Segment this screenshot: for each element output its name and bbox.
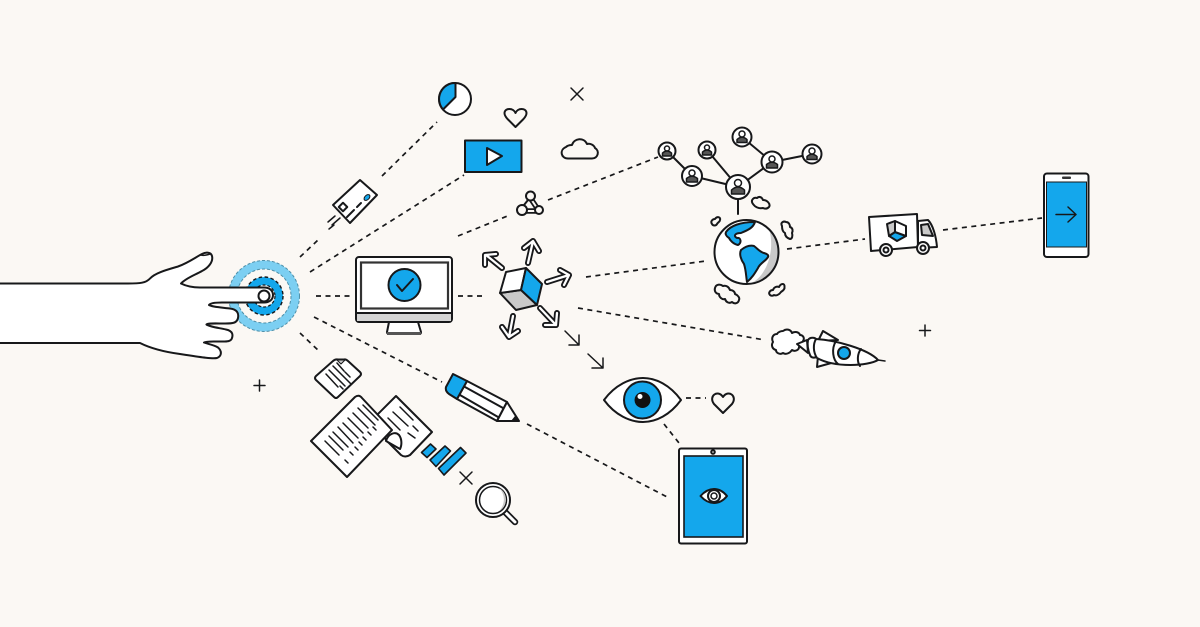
icon: small document	[315, 359, 361, 398]
icon: pointing hand	[0, 253, 273, 358]
icon: cloud top	[562, 139, 598, 158]
exhaust cloud	[772, 330, 804, 354]
icon: pie chart	[439, 83, 471, 115]
icon: desktop monitor	[356, 257, 452, 335]
node	[658, 142, 676, 160]
icon: cube with arrows	[485, 241, 569, 337]
cube on truck	[887, 221, 906, 241]
icon: eye	[604, 378, 681, 422]
node	[762, 152, 782, 172]
node	[726, 175, 750, 199]
icon: magnifying glass	[476, 483, 515, 522]
eye on tablet	[700, 489, 727, 503]
icon: cross bottom	[460, 472, 472, 484]
icon: globe with clouds	[711, 197, 793, 303]
icon: heart top	[505, 109, 526, 127]
icon: bar chart	[422, 444, 466, 475]
dashed connector lines	[300, 122, 1042, 498]
node	[732, 128, 752, 146]
clouds	[711, 197, 793, 303]
icon: target rings	[228, 260, 300, 332]
node	[682, 166, 702, 186]
icon: long documents	[311, 396, 432, 477]
icon: share nodes	[517, 192, 543, 215]
icon: thin arrows	[565, 331, 603, 368]
icon: rocket	[772, 330, 885, 367]
icon: cross top	[571, 88, 583, 100]
icon: plus right	[920, 325, 930, 336]
icon: delivery truck	[869, 214, 937, 256]
icon: heart bottom	[712, 393, 734, 413]
icon: plus left	[254, 380, 265, 391]
icon: credit card	[328, 180, 377, 229]
node	[802, 144, 822, 164]
network of people	[658, 128, 822, 214]
icon: smartphone	[1044, 174, 1088, 257]
icon: video player	[465, 140, 522, 172]
icon: pencil	[446, 374, 519, 421]
icon: tablet	[679, 448, 747, 544]
node	[698, 142, 716, 158]
